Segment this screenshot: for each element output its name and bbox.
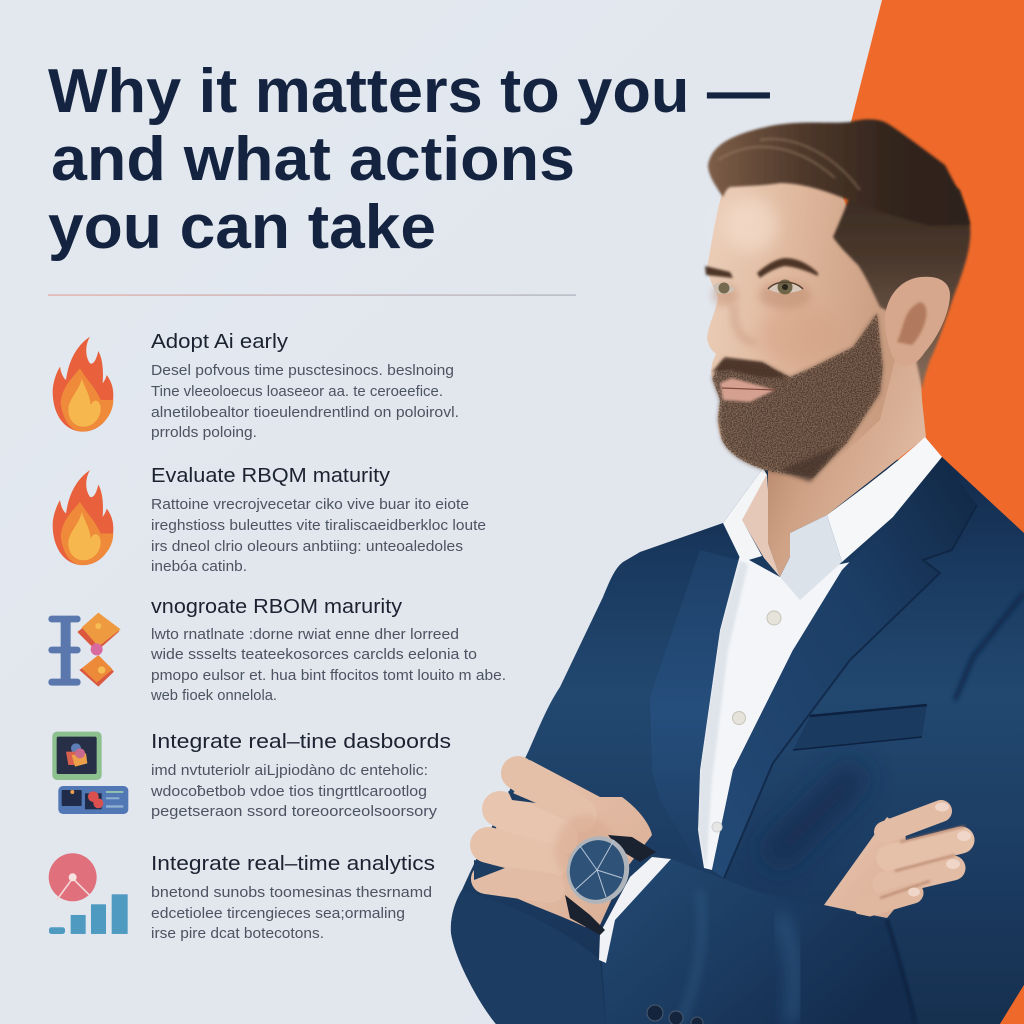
beard <box>712 313 883 482</box>
eyes <box>713 280 803 294</box>
description: edcetiolee tircengieces sea;ormaling <box>151 906 405 922</box>
left sleeve lower fold <box>451 890 606 1024</box>
description: Desel pofvous time pusctesinocs. beslnoing <box>151 363 454 379</box>
description: irse pire dcat botecotons. <box>151 926 324 942</box>
action item 1: adopt AI early <box>53 331 459 441</box>
icon: flame <box>53 470 113 565</box>
description <box>151 497 486 575</box>
description: prrolds poloing. <box>151 425 257 441</box>
faded side of hair <box>833 150 970 392</box>
title <box>48 57 770 262</box>
sleeve showing between fingers <box>508 791 536 803</box>
description: inebóa catinb. <box>151 559 247 575</box>
description <box>151 885 432 942</box>
description: pegetseraon ssord toreoorceolsoorsory <box>151 804 438 820</box>
action item 3: integrate RBOM maturity <box>48 596 506 704</box>
icon: flame <box>53 337 113 432</box>
description: imd nvtuteriolr aiLjpiodàno dc enteholic: <box>151 763 428 779</box>
icon: dashboard screens <box>52 732 128 814</box>
eyebrows <box>705 258 818 278</box>
description: alnetilobealtor tioeulendrentlind on poloirovl. <box>151 405 459 421</box>
person: man in navy suit with crossed arms <box>451 119 1024 1024</box>
heading: Integrate real–time analytics <box>151 853 435 875</box>
heading: Evaluate RBQM maturity <box>151 465 390 487</box>
description: web fioek onnelola. <box>150 688 277 704</box>
description <box>151 363 459 441</box>
left hand <box>474 760 652 927</box>
description <box>150 627 506 704</box>
action item 2: evaluate RBQM maturity <box>53 465 486 575</box>
face <box>705 170 900 482</box>
shirt <box>698 555 860 870</box>
crossed forearm sleeve <box>600 859 920 1024</box>
description: wdocoƀetbob vdoe tios tingrttlcarootlog <box>150 784 427 800</box>
title: and what actions <box>51 125 575 194</box>
heading: Integrate real–tine dasboords <box>151 731 451 753</box>
description: irs dneol clrio oleours anbtiing: unteoaledoles <box>151 539 463 555</box>
right ear <box>885 277 950 366</box>
action item 4: integrate real-time dashboards <box>52 731 451 820</box>
hair <box>708 119 970 392</box>
icon: pie and bar chart <box>49 853 128 934</box>
neck <box>768 350 926 577</box>
description: Tine vleeoloecus loaseeor aa. te ceroeefice. <box>151 384 443 400</box>
orange corner bottom right <box>1000 985 1024 1024</box>
description: pmopo eulsor et. hua bint ffocitos tomt louito m abe. <box>151 668 506 684</box>
shirt collar <box>723 437 942 600</box>
collar left leaf <box>723 468 767 562</box>
icon: blue beam and orange diamonds <box>48 613 121 687</box>
description: wide ssselts teateekosorces carclds eelonia to <box>150 647 477 663</box>
wristwatch <box>559 829 656 935</box>
heading: vnogroate RBOM marurity <box>151 596 402 618</box>
lips <box>720 378 775 402</box>
breast pocket <box>793 705 927 750</box>
top of hair <box>708 119 970 226</box>
collar right leaf <box>827 437 942 562</box>
description: lwto rnatlnate :dorne rwiat enne dher lorreed <box>151 627 459 643</box>
shirt buttons <box>712 611 781 832</box>
sleeve buttons <box>647 1005 703 1024</box>
suit jacket <box>451 457 1024 1024</box>
title: Why it matters to you — <box>48 57 770 126</box>
action item 5: integrate real-time analytics <box>49 853 435 942</box>
description: bnetond sunobs toomesinas thesrnamd <box>151 885 432 901</box>
heading: Adopt Ai early <box>151 331 288 353</box>
right hand with fingers <box>824 802 971 918</box>
description: Rattoine vrecrojvecetar ciko vive buar ito eiote <box>151 497 469 513</box>
description <box>150 763 438 820</box>
title: you can take <box>48 193 436 262</box>
jacket lapels <box>650 457 977 878</box>
orange background shape <box>800 0 1024 1024</box>
shirt cuff <box>599 857 671 963</box>
description: ireghstioss buleuttes vite tiraliscaeidberkloc loute <box>151 518 486 534</box>
